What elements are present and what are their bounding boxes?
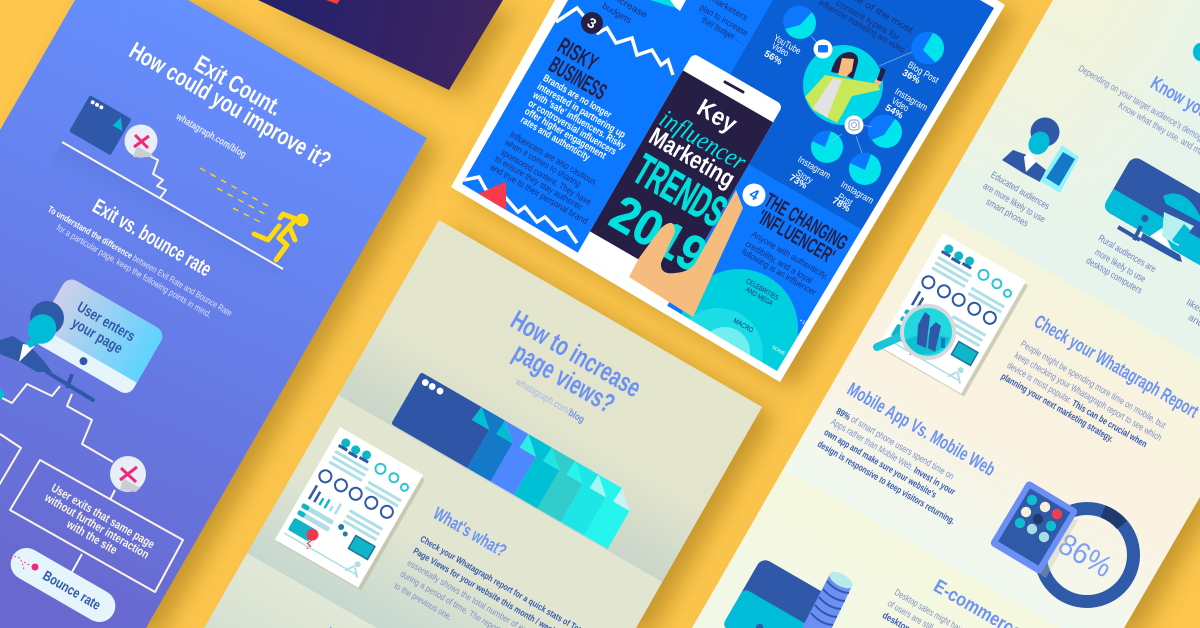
text: risky business body <box>488 129 598 226</box>
phone headline: TRENDS <box>625 145 735 237</box>
concentric circles chart: CELEBRITIES <box>745 278 780 302</box>
concentric circles chart <box>682 269 806 371</box>
text: check your report: device is most popular. This can be crucial when <box>1005 360 1149 450</box>
pie: instagram video: Instagram <box>893 86 929 114</box>
donut chart 86 percent <box>1040 508 1134 602</box>
text: educated: are more likely to use <box>981 181 1047 225</box>
title <box>128 42 331 168</box>
red triangle <box>480 183 505 209</box>
icon: youtube <box>814 40 832 58</box>
phone headline <box>608 98 746 270</box>
pie: youtube video: Video <box>769 41 791 59</box>
flow connectors <box>0 384 115 572</box>
icon: teal person partial <box>0 388 4 400</box>
concentric circles chart: MACRO <box>732 317 755 335</box>
text: changing influencer <box>740 229 830 297</box>
text: risky business bold: Brands are no longer <box>541 73 613 121</box>
heading: risky business: BUSINESS <box>545 51 611 105</box>
pie: instagram video: Video <box>889 96 911 114</box>
zigzag top <box>556 8 673 75</box>
heading: whats what: What's what? <box>430 503 510 561</box>
top text fragments <box>601 0 915 55</box>
icon: exit marker 2 <box>110 456 146 492</box>
pill: bounce rate <box>8 548 116 622</box>
text: risky business body: when it comes to sharing <box>503 137 583 189</box>
magnifier <box>877 306 954 358</box>
top text fragments: budgets <box>601 1 634 26</box>
icon: browser window <box>69 95 132 155</box>
pie: instagram story: Story <box>793 168 815 186</box>
number 4: 4 <box>746 186 762 205</box>
pie: youtube video <box>764 6 817 64</box>
phone headline: Marketing <box>644 122 740 194</box>
pill: bounce rate: Bounce rate <box>40 567 104 613</box>
text: mobile app: Apps rather than Mobile Web. Invest in your <box>829 417 957 497</box>
text: risky business body: Influencers are also cautious <box>508 129 598 187</box>
influencer illustration <box>803 45 886 125</box>
number 4 <box>742 184 766 206</box>
pie: instagram post: Instagram <box>839 179 875 207</box>
box: user exits <box>10 460 183 592</box>
text: mobile app: own app and make sure your website's <box>822 427 938 501</box>
title: How to increase <box>506 305 646 403</box>
donut chart 86 percent: 86% <box>1053 528 1117 584</box>
heading: the changing influencer: THE CHANGING <box>760 189 852 255</box>
icon: educated audience <box>1002 118 1079 193</box>
text: risky business bold: or controversial influencers <box>526 98 618 158</box>
text: educated: smart phones <box>984 196 1030 230</box>
text: educated <box>981 170 1051 230</box>
text: check your report: planning your next marketing strategy. <box>999 371 1115 445</box>
heading: mobile app vs mobile web: Mobile App Vs. Mobile Web <box>843 379 999 481</box>
text: rural: more likely to use <box>1093 247 1147 285</box>
phone headline: 2019 <box>601 185 717 283</box>
pie: instagram post: 78% <box>830 195 852 215</box>
panel: influencer marketing trends <box>451 0 1005 398</box>
panel: dark top card <box>258 0 503 90</box>
icon: rural monitor <box>1102 155 1200 266</box>
phone <box>573 53 783 313</box>
box: user exits: with the site <box>64 517 120 557</box>
text: rural: desktop computers <box>1084 255 1144 297</box>
concentric circles chart: +1M <box>798 318 810 328</box>
phone headline: influencer <box>655 104 752 177</box>
floor line <box>62 142 283 269</box>
text: mobile app <box>815 406 957 527</box>
pie: instagram video <box>868 86 929 148</box>
browser with growing arrows <box>391 372 638 549</box>
heading: the changing influencer <box>753 189 852 268</box>
text: risky business bold: rates and authenticity <box>518 115 592 163</box>
text: educated: Educated audiences <box>989 170 1051 212</box>
concentric circles chart: AND MEGA <box>744 286 774 308</box>
icon: monitor with coins <box>722 557 855 628</box>
pie: instagram story <box>787 130 843 192</box>
panel: know your audience <box>692 0 1200 628</box>
report thumbnail <box>274 427 427 590</box>
phone headline: Key <box>692 94 742 138</box>
pie: instagram story: 73% <box>787 172 809 192</box>
monitor: user enters: your page <box>69 315 125 357</box>
text: mobile app: 89% of smart phone users spend time on <box>834 406 956 482</box>
concentric circles chart: SOME 1M <box>771 345 793 361</box>
box: user exits: User exits that same page <box>49 481 157 551</box>
heading: the changing influencer: 'INFLUENCER' <box>753 206 839 268</box>
icon: tablet <box>989 480 1079 578</box>
icon: user <box>0 301 64 372</box>
pie: youtube video: 56% <box>762 48 784 68</box>
title: page views? <box>508 337 620 419</box>
text: changing influencer: credibility, and a loyal <box>744 239 814 285</box>
heading: exit vs bounce: Exit vs. bounce rate <box>89 195 215 281</box>
intro text: To understand the difference between Exit Rate and Bounce Rate <box>46 204 234 318</box>
pie: blog post: Blog Post <box>906 60 941 86</box>
text: rural <box>1084 233 1200 330</box>
title: How could you improve it? <box>125 37 335 175</box>
number 3 <box>581 12 603 34</box>
pie: instagram video: 54% <box>883 102 905 122</box>
text: risky business bold: with 'safe' influencers. Risky <box>530 90 628 152</box>
panel: exit count <box>0 0 427 628</box>
stairs <box>150 156 166 198</box>
blog url: whatagraph.com/blog <box>173 111 248 161</box>
pie: blog post: 36% <box>900 67 922 87</box>
text: changing influencer: Anyone with authenticity, <box>750 229 830 281</box>
number 3: 3 <box>585 14 600 32</box>
panel: how to increase page views <box>204 220 762 628</box>
text: ecommerce <box>880 587 967 628</box>
text: risky business body: and true to their personal brand <box>488 162 590 226</box>
zigzag bottom <box>464 177 577 243</box>
title <box>506 305 646 419</box>
pie: instagram story: Instagram <box>796 154 832 182</box>
pie: instagram post <box>830 153 881 215</box>
icon: teal corner <box>1193 43 1200 61</box>
box: user exits: without further interaction <box>42 490 152 562</box>
text: risky business body: sponsored content. They have <box>499 147 593 207</box>
text: rural: Rural audiences are <box>1096 233 1158 275</box>
blog url: whatagraph.com/blog <box>513 376 587 425</box>
pie: blog post <box>879 32 944 87</box>
report thumbnail <box>878 233 1030 396</box>
icon: runner <box>254 214 308 260</box>
pie: youtube video: YouTube <box>771 33 803 57</box>
connector lines <box>830 125 872 153</box>
speed dashes <box>200 168 268 222</box>
text: changing influencer: following is an influencer <box>740 247 818 297</box>
monitor: user enters: User enters <box>74 299 138 345</box>
text: risky business bold: interested in partnering up <box>535 81 627 141</box>
monitor: user enters <box>31 276 166 400</box>
pie: instagram post: Post <box>836 191 854 209</box>
text: risky business body: to ensure they stay authentic <box>493 154 585 213</box>
top text fragments: their budget <box>700 15 736 42</box>
icon: instagram <box>844 116 864 134</box>
text: mobile app: design is responsive to keep visitors returning. <box>815 439 957 527</box>
title: Exit Count. <box>190 50 286 122</box>
heading: risky business <box>548 37 607 100</box>
body text: to the previous one. <box>392 581 454 622</box>
icon: exit marker <box>124 124 158 158</box>
hand <box>629 190 743 317</box>
text: risky business bold: offer higher engagement <box>522 106 608 162</box>
intro text: for a particular page, keep the following points in mind. <box>55 222 213 320</box>
text: risky business bold <box>518 73 628 163</box>
heading: risky business: RISKY <box>553 32 603 76</box>
top text fragments: plan to increase <box>698 2 750 38</box>
